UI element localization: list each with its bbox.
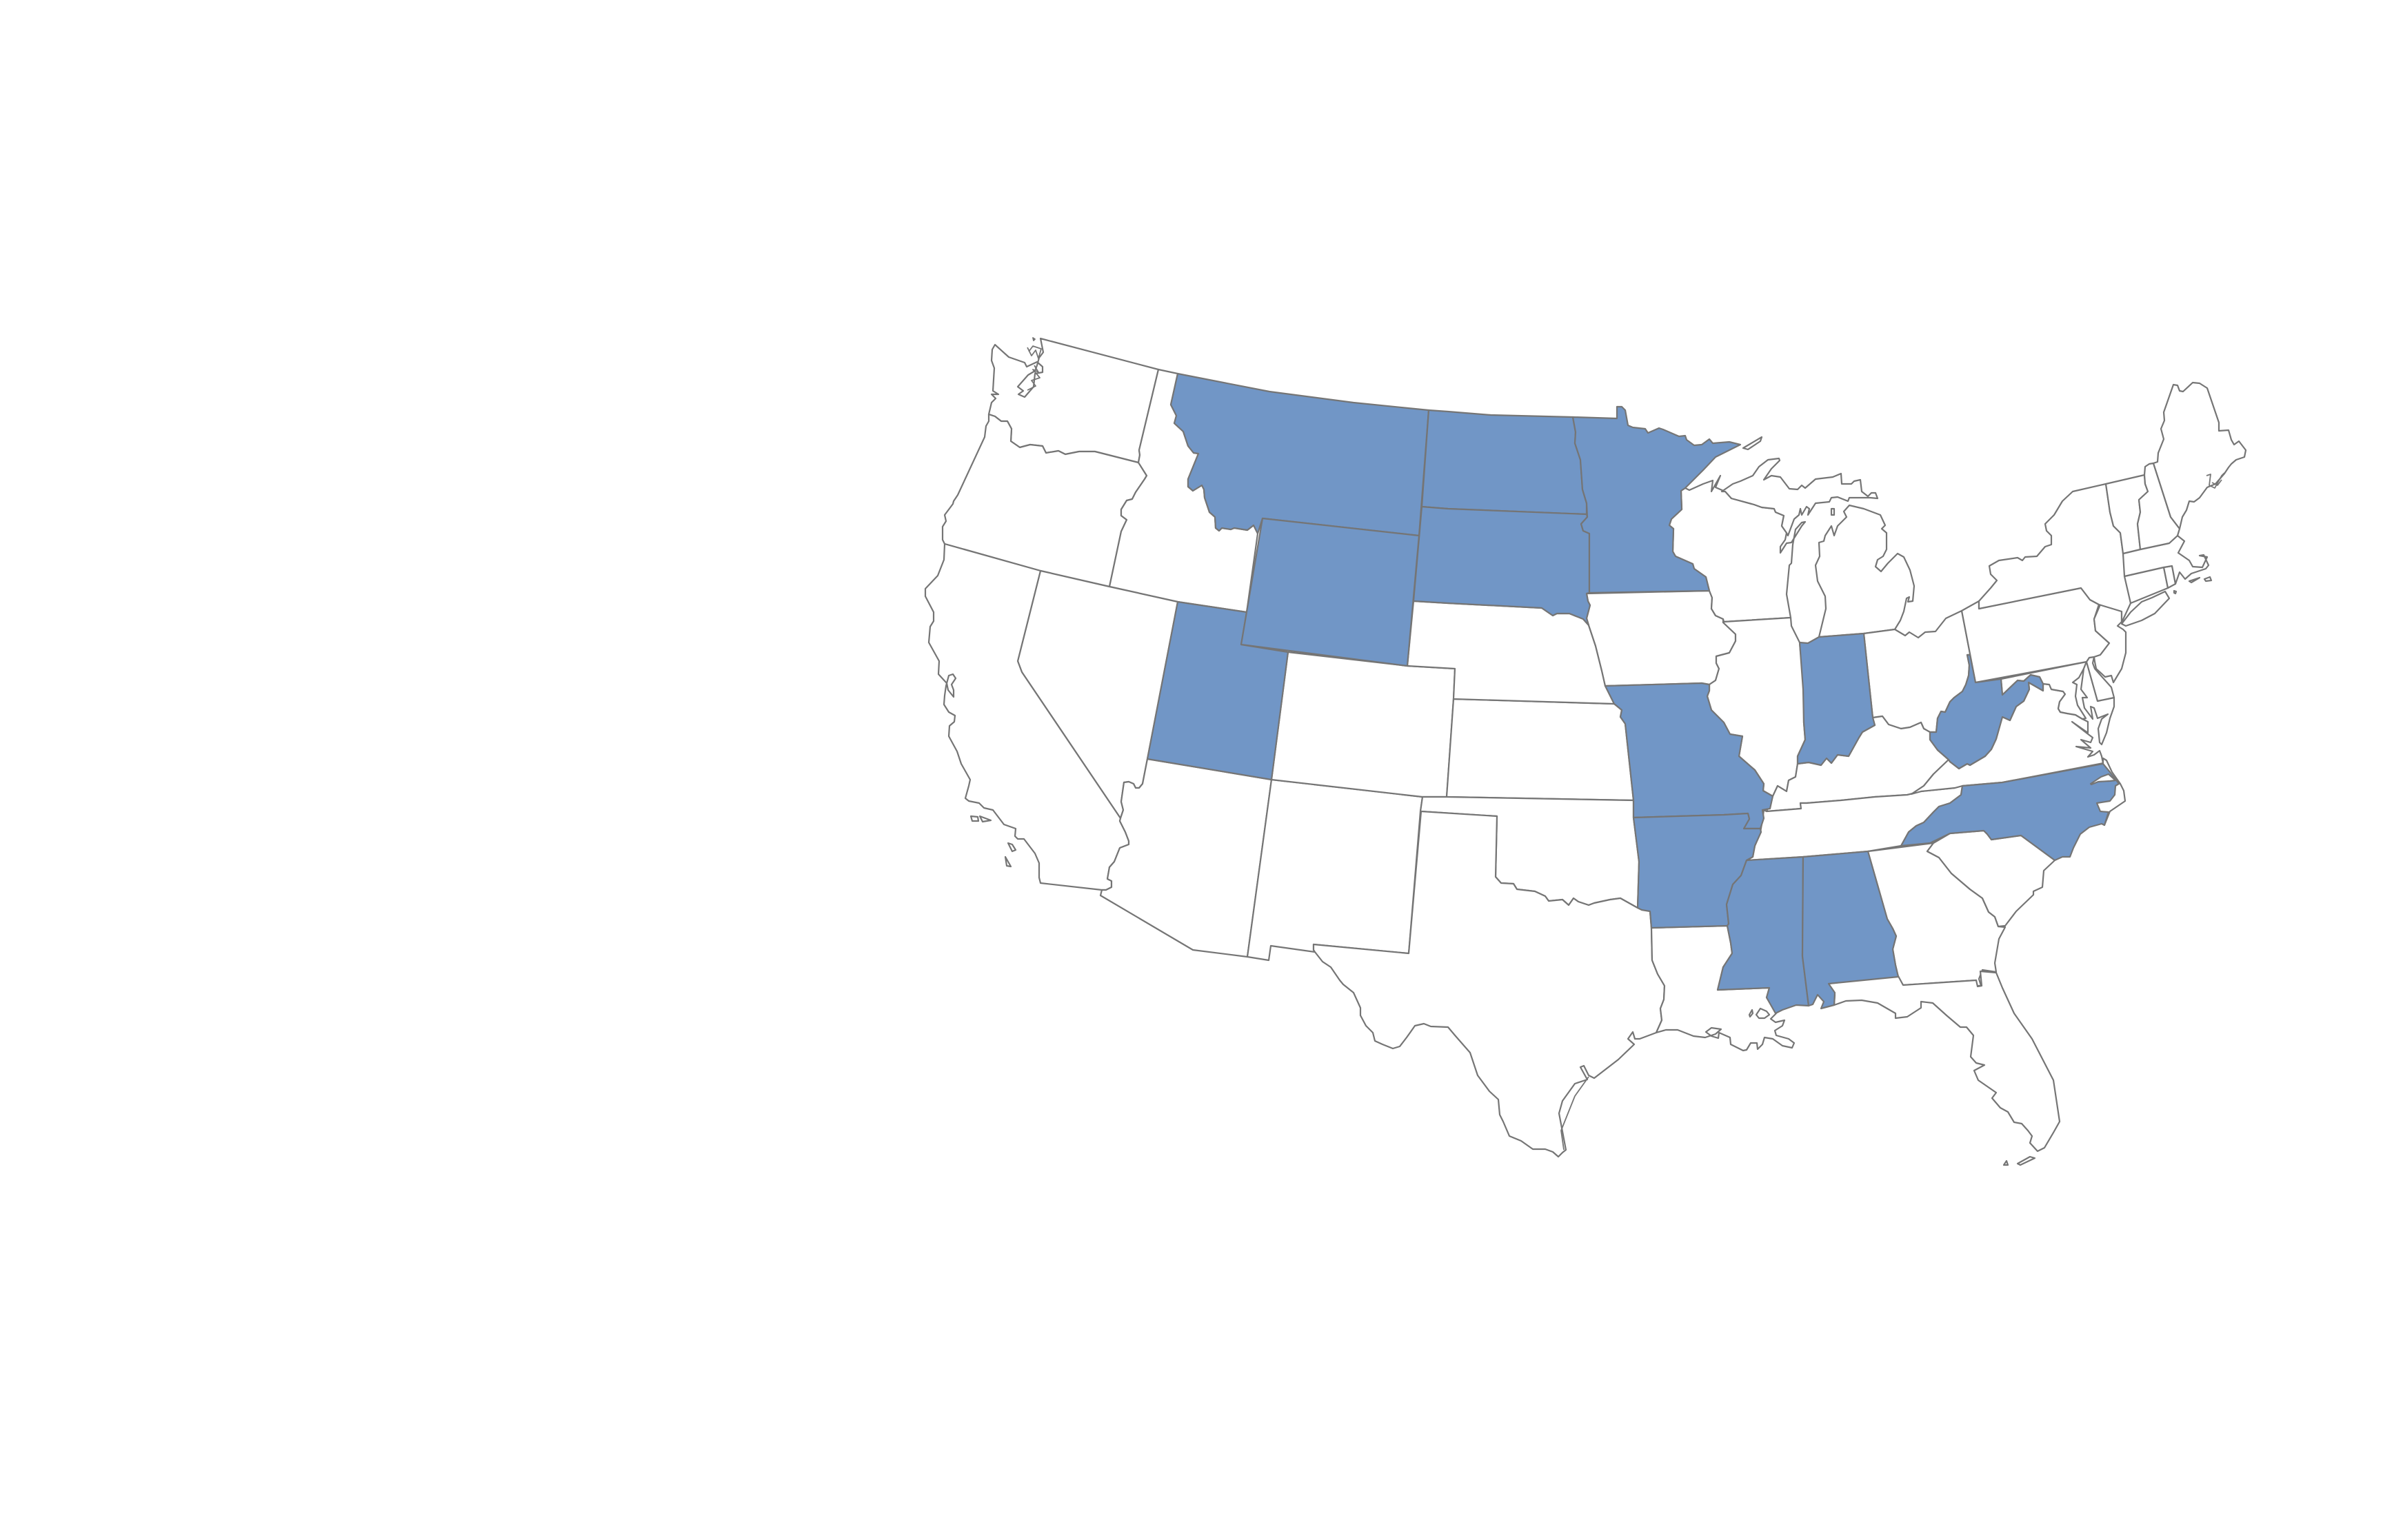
state: Nevada: [1018, 571, 1178, 818]
state: Kentucky: [1767, 716, 1949, 811]
state: New Hampshire: [2138, 463, 2180, 549]
state: West Virginia (highlighted): [1930, 655, 2043, 769]
island: Beaver Island: [1831, 509, 1834, 515]
state: Michigan Upper Peninsula: [1722, 458, 1878, 536]
island: Long Island: [2122, 591, 2169, 626]
state: Minnesota (highlighted): [1573, 407, 1740, 593]
state: Washington: [989, 338, 1158, 463]
state: Oklahoma: [1420, 797, 1639, 908]
state: Idaho: [1109, 369, 1258, 612]
state: Indiana (highlighted): [1798, 634, 1875, 765]
state: Wyoming (highlighted): [1241, 518, 1419, 666]
state: Alabama (highlighted): [1802, 851, 1898, 1009]
state: Illinois: [1707, 618, 1805, 796]
state: Kansas: [1447, 699, 1633, 800]
state: Vermont: [2106, 475, 2148, 554]
state: Massachusetts: [2123, 536, 2209, 584]
lakes: Pontchartrain and Maurepas: [1749, 1009, 1769, 1018]
state: South Carolina: [1927, 831, 2055, 926]
state: Michigan Lower Peninsula: [1816, 505, 1914, 637]
barrier island: Texas coast: [1561, 1077, 1589, 1150]
state: California: [925, 544, 1129, 890]
state: Colorado: [1271, 652, 1455, 797]
islands: Cape Cod islands: [2174, 577, 2211, 594]
state: Arkansas (highlighted): [1633, 813, 1761, 928]
islands: Channel Islands: [971, 816, 1016, 867]
state: Texas: [1314, 811, 1665, 1157]
state: Mississippi (highlighted): [1718, 857, 1809, 1013]
island: Isle Royale: [1743, 437, 1762, 449]
islands: Puget Sound: [1027, 338, 1041, 390]
state: Missouri (highlighted): [1605, 683, 1773, 829]
islands: Florida Keys: [2004, 1157, 2035, 1165]
state: Pennsylvania: [1962, 588, 2109, 682]
state: Connecticut: [2124, 567, 2168, 603]
state: Oregon: [943, 414, 1147, 587]
state: Louisiana: [1651, 926, 1794, 1051]
state: Wisconsin: [1669, 476, 1805, 622]
state: Virginia: [1911, 682, 2103, 794]
state: Utah (highlighted): [1147, 602, 1288, 780]
state: South Dakota (highlighted): [1414, 507, 1590, 625]
state: Maryland: [2001, 662, 2087, 719]
state: New Jersey: [2094, 605, 2126, 682]
state: Georgia: [1868, 843, 2005, 986]
state: North Dakota (highlighted): [1422, 410, 1587, 514]
state: Ohio: [1864, 611, 1975, 732]
state: Tennessee: [1747, 786, 1962, 860]
state: New Mexico: [1247, 780, 1422, 960]
state: Montana (highlighted): [1171, 374, 1429, 536]
state: New York: [1979, 484, 2131, 622]
state: Delaware: [2087, 657, 2114, 701]
state: Arizona: [1100, 759, 1271, 957]
state: North Carolina (highlighted): [1901, 764, 2119, 860]
state: Rhode Island: [2164, 566, 2175, 588]
outer banks: North Carolina coast: [2096, 758, 2125, 825]
inlet: Albemarle Sound: [2091, 774, 2115, 784]
state: Florida: [1828, 971, 2060, 1151]
state: Iowa: [1587, 591, 1736, 686]
state: Delmarva Peninsula: [2081, 662, 2114, 744]
state: Nebraska: [1407, 601, 1614, 704]
state: Maine: [2153, 383, 2246, 529]
islands: Maine coast: [2206, 473, 2224, 488]
